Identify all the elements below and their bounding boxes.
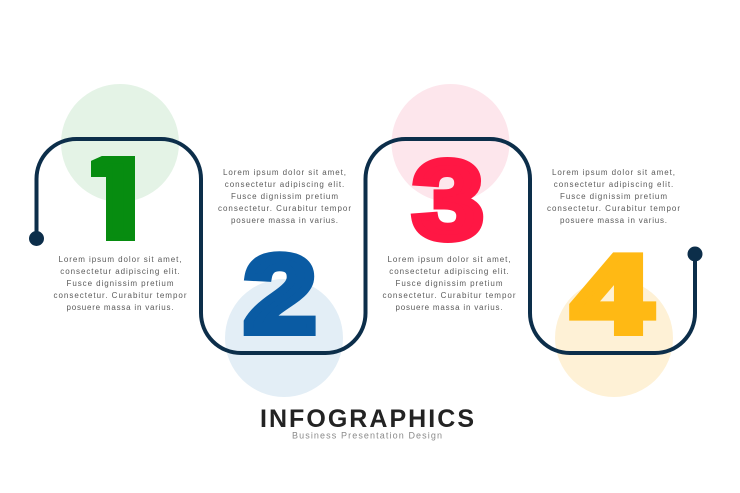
text block: step 1: consectetur. Curabitur tempor — [54, 291, 187, 300]
text block: step 1 — [54, 255, 187, 312]
text block: step 4: Lorem ipsum dolor sit amet, — [552, 168, 675, 177]
text block: step 3: consectetur. Curabitur tempor — [382, 291, 516, 300]
text block: step 4 — [547, 168, 680, 225]
circle: step 2 — [225, 279, 343, 397]
text block: step 4: consectetur. Curabitur tempor — [547, 204, 680, 213]
connector line — [36, 139, 695, 353]
circle: step 1 — [61, 84, 179, 202]
infographic canvas — [29, 84, 702, 440]
subtitle: Business Presentation Design — [292, 430, 442, 440]
text block: step 3: posuere massa in varius. — [396, 303, 502, 312]
text block: step 4: posuere massa in varius. — [560, 216, 667, 225]
number 4: 4 — [572, 234, 652, 356]
number 3: 3 — [413, 140, 483, 262]
text block: step 1: Lorem ipsum dolor sit amet, — [58, 255, 182, 264]
number 2: 2 — [244, 233, 316, 356]
text block: step 4: Fusce dignissim pretium — [560, 192, 667, 201]
text block: step 2: Lorem ipsum dolor sit amet, — [223, 168, 346, 177]
start dot — [29, 231, 44, 246]
text block: step 1: Fusce dignissim pretium — [66, 279, 174, 288]
text block: step 4: consectetur adipiscing elit. — [554, 180, 673, 189]
text block: step 1: consectetur adipiscing elit. — [60, 267, 180, 276]
text block: step 3: Lorem ipsum dolor sit amet, — [388, 255, 510, 264]
text block: step 2 — [218, 168, 351, 225]
text block: step 2: Fusce dignissim pretium — [231, 192, 338, 201]
text block: step 3: consectetur adipiscing elit. — [389, 267, 509, 276]
title: INFOGRAPHICS — [260, 405, 474, 433]
circle: step 3 — [392, 84, 510, 202]
circle: step 4 — [555, 279, 673, 397]
end dot — [688, 246, 702, 262]
text block: step 1: posuere massa in varius. — [66, 303, 174, 312]
text block: step 2: posuere massa in varius. — [231, 216, 338, 225]
text block: step 3 — [382, 255, 516, 312]
text block: step 2: consectetur. Curabitur tempor — [218, 204, 351, 213]
text block: step 3: Fusce dignissim pretium — [396, 279, 503, 288]
text block: step 2: consectetur adipiscing elit. — [225, 180, 344, 189]
number 1: 1 — [65, 133, 163, 268]
